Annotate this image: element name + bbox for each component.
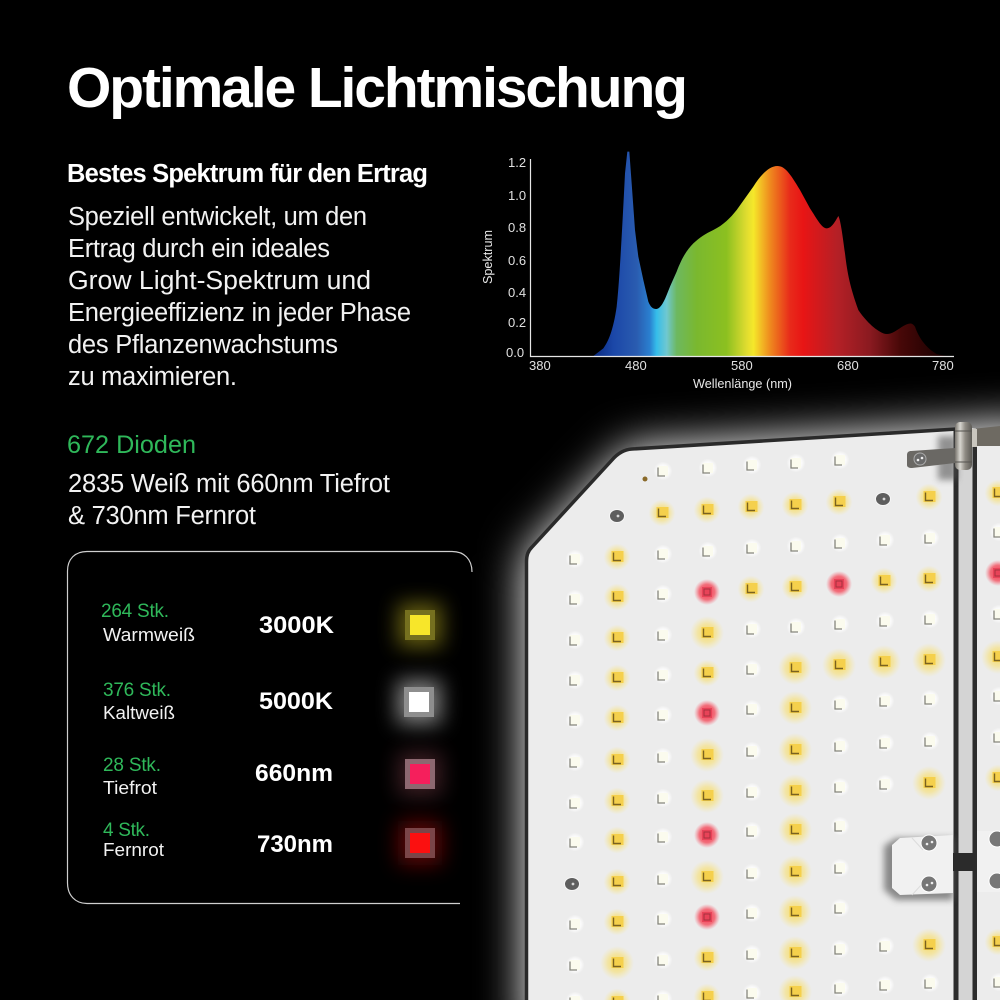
diode description: 2835 Weiß mit 660nm Tiefrot [68,470,390,498]
diode count: 672 Dioden [67,431,196,459]
axes [530,159,954,356]
mounting screws [564,476,890,890]
row: warm white: 3000K [259,612,335,639]
body text: des Pflanzenwachstums [68,331,338,359]
gap between boards [956,428,976,1000]
row: cold white: Kaltweiß [103,703,175,723]
board divider lines [956,428,975,1000]
row: deep red: Tiefrot [103,778,157,798]
y axis label: Spektrum [480,230,495,284]
body text: Energieeffizienz in jeder Phase [68,299,411,327]
y axis ticks: 1.0 [508,188,526,203]
x axis ticks: 480 [625,358,647,373]
y axis ticks: 0.8 [508,220,526,235]
row: far red: 4 Stk. [103,820,150,841]
x axis ticks: 580 [731,358,753,373]
title: Optimale Lichtmischung [67,56,688,120]
panel outline [68,552,472,904]
y axis ticks: 0.2 [508,315,526,330]
body text: Ertrag durch ein ideales [68,235,330,263]
row: far red: Fernrot [103,840,164,860]
spectrum chart [480,152,954,391]
panel glow [525,422,1000,1000]
x axis label: Wellenlänge (nm) [693,377,792,391]
body text [68,203,411,391]
x axis ticks: 780 [932,358,954,373]
body text: zu maximieren. [68,363,237,391]
y axis ticks: 0.4 [508,285,526,300]
y axis ticks: 1.2 [508,155,526,170]
row: far red [103,820,442,865]
LED grid [566,450,1000,1000]
right board [977,446,1000,1000]
row: warm white [101,601,442,647]
legend panel [68,552,472,904]
body text: Speziell entwickelt, um den [68,203,367,231]
row: warm white: 264 Stk. [101,601,169,622]
row: cold white: 5000K [259,688,334,715]
x axis ticks [529,358,954,373]
y axis ticks: 0.0 [506,345,524,360]
left board [526,429,957,1000]
row: cold white: 376 Stk. [103,680,171,701]
y axis ticks [506,155,526,360]
x axis ticks: 380 [529,358,551,373]
LED panel [525,422,1000,1000]
row: far red: 730nm [257,831,333,858]
subheading: Bestes Spektrum für den Ertrag [67,160,428,188]
row: deep red: 660nm [255,760,333,787]
row: cold white [103,680,441,724]
spectrum curve [593,152,947,356]
y axis ticks: 0.6 [508,253,526,268]
body text: Grow Light-Spektrum und [68,267,371,295]
row: deep red: 28 Stk. [103,755,161,776]
diode description: & 730nm Fernrot [68,502,256,530]
top hinge [907,422,977,480]
x axis ticks: 680 [837,358,859,373]
top frame right [972,426,1000,446]
row: deep red [103,752,442,798]
row: warm white: Warmweiß [103,625,195,645]
diode description [68,470,390,530]
bottom bracket [884,831,1000,900]
